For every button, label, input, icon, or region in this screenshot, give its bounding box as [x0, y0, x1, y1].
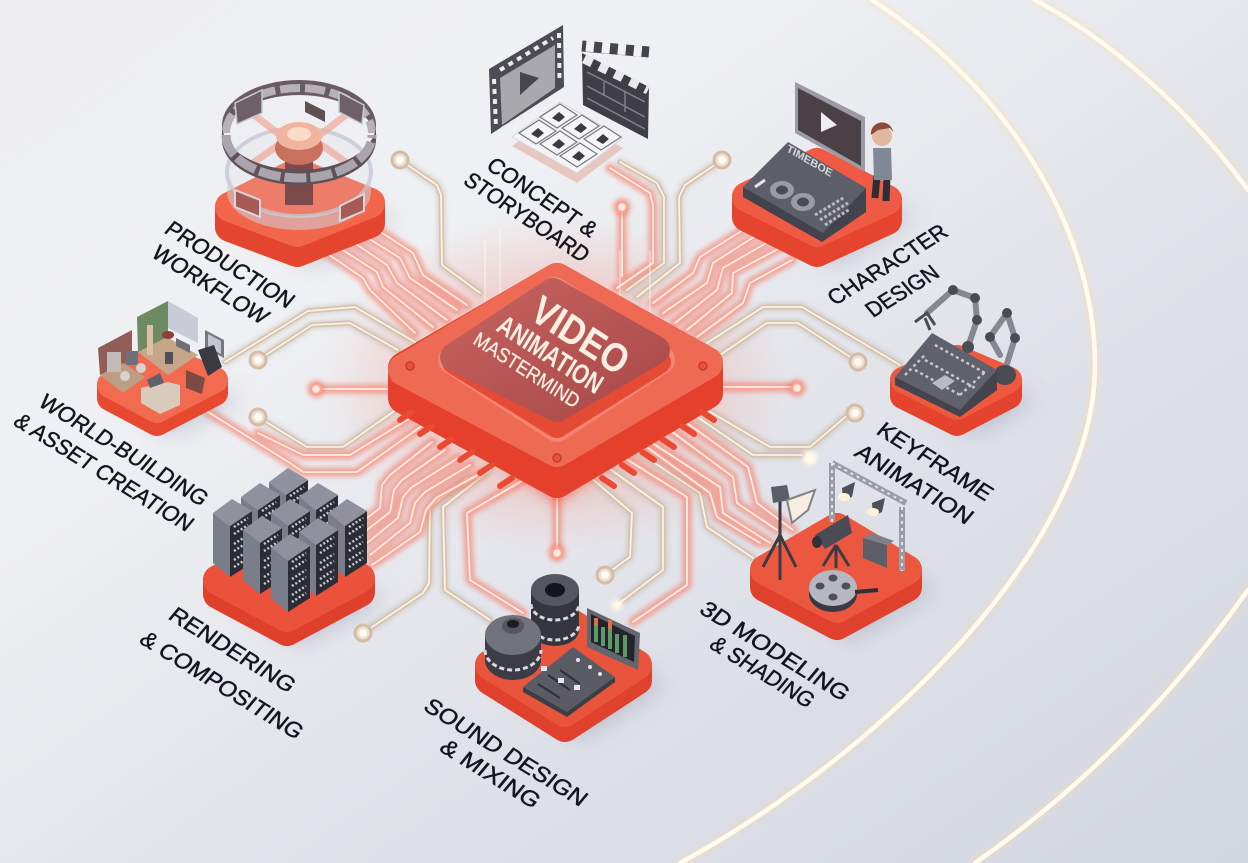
faint vertical light beams — [485, 230, 650, 340]
label: 3D modeling and shading: 3D MODELING — [695, 596, 856, 705]
chip screws — [406, 362, 707, 462]
storyboard stack — [512, 102, 623, 183]
label: rendering and compositing: & COMPOSITING — [135, 626, 309, 744]
front film band — [222, 125, 376, 185]
chip title: VIDEO — [523, 287, 637, 384]
icon: server blocks — [213, 468, 367, 612]
icon: timeline console and character: TIMEBOE — [785, 143, 834, 180]
platform: production workflow — [230, 173, 370, 252]
chip glow — [321, 215, 791, 555]
icon: timeline console and character — [743, 82, 893, 242]
icon: robot arms and control board — [895, 285, 1020, 417]
label: sound design and mixing: & MIXING — [435, 734, 546, 813]
truss — [832, 463, 906, 571]
label: production workflow: PRODUCTION — [160, 216, 300, 313]
label: world-building and asset creation: WORLD-BUILDING — [34, 389, 214, 510]
label: production workflow: WORKFLOW — [147, 240, 274, 329]
label: sound design and mixing: SOUND DESIGN — [419, 693, 593, 811]
back film band — [222, 80, 376, 140]
label: concept and storyboard: STORYBOARD — [459, 167, 595, 267]
film reel — [809, 570, 878, 612]
central chip — [395, 279, 720, 505]
label: 3D modeling and shading: & SHADING — [705, 631, 820, 712]
platform: character design — [747, 163, 887, 252]
character figure — [871, 122, 893, 201]
film frame — [489, 25, 564, 134]
platform shadows — [120, 180, 1035, 740]
label: keyframe animation — [850, 417, 999, 529]
platform: sound design and mixing — [490, 620, 637, 727]
icon: miniature studio rooms — [98, 301, 224, 414]
label: rendering and compositing: RENDERING — [164, 602, 302, 697]
short reel — [485, 615, 541, 680]
circuit traces — [208, 160, 900, 633]
icon: film reels, mixer and meters — [485, 574, 640, 717]
softbox on tripod — [763, 485, 815, 580]
clapperboard — [582, 46, 649, 139]
lower glass ring — [227, 128, 371, 216]
camera — [812, 515, 852, 568]
chip title: ANIMATION — [492, 309, 609, 400]
level meter — [587, 608, 640, 670]
platform: 3D modeling and shading — [765, 528, 907, 625]
tall reel — [531, 574, 579, 646]
chip pins — [400, 412, 714, 486]
icon: concept and storyboard — [489, 25, 649, 183]
equipment box — [863, 533, 894, 568]
trace nodes — [250, 152, 866, 641]
label: keyframe animation: ANIMATION — [850, 439, 979, 529]
chip title — [469, 287, 637, 413]
platform: rendering and compositing — [218, 545, 360, 631]
chip title: MASTERMIND — [469, 328, 584, 413]
label: keyframe animation: KEYFRAME — [872, 417, 999, 505]
icon: film ring — [222, 80, 376, 230]
icon: studio with lights, camera and reel — [763, 463, 906, 612]
platform: world-building and asset creation — [110, 355, 215, 423]
label: character design: DESIGN — [860, 260, 944, 322]
platform: keyframe animation — [903, 358, 1009, 423]
label: world-building and asset creation: & ASSET CREATION — [9, 408, 199, 536]
mixer — [523, 647, 615, 717]
glowing arcs — [680, 0, 1248, 863]
label: character design: CHARACTER — [822, 219, 953, 310]
chip base glow — [395, 360, 720, 505]
label: concept and storyboard: CONCEPT & — [482, 152, 603, 242]
